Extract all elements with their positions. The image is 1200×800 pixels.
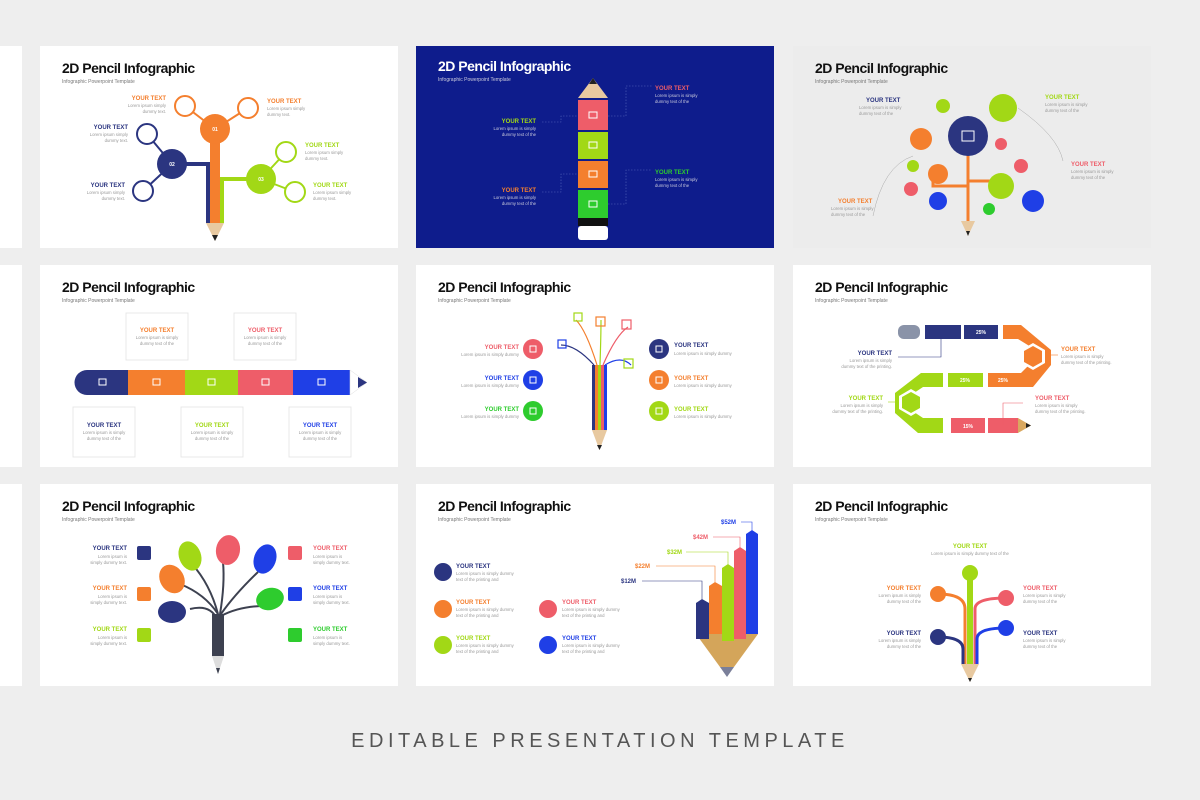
slide 7: leaf tree pencil: Infographic Powerpoint Template bbox=[62, 517, 135, 523]
slide 6: puzzle pencil: Lorem ipsum is simply bbox=[849, 358, 893, 363]
slide 7: leaf tree pencil: Lorem ipsum is bbox=[313, 594, 342, 599]
slide 2: vertical pencil on blue: YOUR TEXT bbox=[502, 119, 536, 125]
slide 8: pencil bar chart: $42M bbox=[693, 535, 708, 541]
slide 8: pencil bar chart bbox=[416, 484, 774, 686]
slide 7: leaf tree pencil: simply dummy text. bbox=[313, 600, 350, 605]
slide 1: branching pencil: Infographic Powerpoint Template bbox=[62, 79, 135, 85]
slide 9: branching pencil 2: Lorem ipsum is simply bbox=[878, 638, 922, 643]
slide 5: colored pencil tree: 2D Pencil Infographic bbox=[438, 279, 571, 295]
slide 4: horizontal pencil: YOUR TEXT bbox=[248, 328, 282, 334]
slide 9: branching pencil 2: dummy text of the bbox=[887, 644, 922, 649]
slide 8: pencil bar chart: Lorem ipsum is simply dummy bbox=[562, 607, 621, 612]
slide 1: branching pencil: 03 bbox=[258, 177, 264, 183]
slide 6: puzzle pencil: 25% bbox=[976, 330, 987, 336]
slide 4: horizontal pencil: Lorem ipsum is simply bbox=[191, 430, 234, 435]
slide 9: branching pencil 2 bbox=[793, 484, 1151, 686]
slide 8: pencil bar chart: Lorem ipsum is simply dummy bbox=[562, 643, 621, 648]
slide 3: bubble tree: YOUR TEXT bbox=[866, 98, 901, 104]
slide 8: pencil bar chart: $22M bbox=[635, 564, 650, 570]
slide 1: branching pencil: 02 bbox=[169, 162, 175, 168]
slide 4: horizontal pencil: 2D Pencil Infographic bbox=[62, 279, 195, 295]
slide 7: leaf tree pencil: YOUR TEXT bbox=[313, 586, 348, 592]
slide 6: puzzle pencil: dummy text of the printing. bbox=[1035, 409, 1086, 414]
slide 7: leaf tree pencil: YOUR TEXT bbox=[93, 627, 127, 633]
slide 9: branching pencil 2: 2D Pencil Infographic bbox=[815, 498, 948, 514]
slide 4: horizontal pencil: dummy text of the bbox=[140, 341, 175, 346]
slide 1: branching pencil: dummy text. bbox=[313, 196, 336, 201]
slide 5: colored pencil tree bbox=[416, 265, 774, 467]
slide 7: leaf tree pencil: Lorem ipsum is bbox=[313, 554, 342, 559]
slide 6: puzzle pencil: Infographic Powerpoint Template bbox=[815, 298, 888, 304]
slide 9: branching pencil 2: Lorem ipsum is simply bbox=[1023, 638, 1066, 643]
slide 6: puzzle pencil: YOUR TEXT bbox=[858, 351, 892, 357]
slide 9: branching pencil 2: dummy text of the bbox=[1023, 599, 1058, 604]
slide 5: colored pencil tree: Lorem ipsum is simply dummy bbox=[461, 414, 520, 419]
slide 7: leaf tree pencil: simply dummy text. bbox=[90, 600, 127, 605]
slide 7: leaf tree pencil bbox=[40, 484, 398, 686]
slide 5: colored pencil tree: Lorem ipsum is simply dummy bbox=[674, 351, 733, 356]
slide 7: leaf tree pencil: Lorem ipsum is bbox=[98, 594, 127, 599]
slide 9: branching pencil 2: YOUR TEXT bbox=[1023, 631, 1058, 637]
slide 9: branching pencil 2: dummy text of the bbox=[1023, 644, 1058, 649]
slide 7: leaf tree pencil: simply dummy text. bbox=[90, 560, 127, 565]
slide 6: puzzle pencil: YOUR TEXT bbox=[849, 396, 883, 402]
slide 5: colored pencil tree: Lorem ipsum is simply dummy bbox=[674, 414, 733, 419]
slide 2: vertical pencil on blue: YOUR TEXT bbox=[655, 86, 690, 92]
slide 8: pencil bar chart: Infographic Powerpoint Template bbox=[438, 517, 511, 523]
slide 3: bubble tree: dummy text of the bbox=[859, 111, 894, 116]
slide 8: pencil bar chart: $32M bbox=[667, 550, 682, 556]
slide 7: leaf tree pencil: YOUR TEXT bbox=[93, 586, 127, 592]
slide 2: vertical pencil on blue: Lorem ipsum is simply bbox=[655, 93, 698, 98]
slide 8: pencil bar chart: $52M bbox=[721, 520, 736, 526]
slide 5: colored pencil tree: YOUR TEXT bbox=[485, 345, 519, 351]
slide 1: branching pencil: 01 bbox=[212, 127, 218, 133]
slide 2: vertical pencil on blue: YOUR TEXT bbox=[502, 188, 536, 194]
slide 1: branching pencil: YOUR TEXT bbox=[305, 143, 340, 149]
slide 4: horizontal pencil: Infographic Powerpoint Template bbox=[62, 298, 135, 304]
slide 3: bubble tree: Lorem ipsum is simply bbox=[1071, 169, 1114, 174]
slide 7: leaf tree pencil: Lorem ipsum is bbox=[98, 635, 127, 640]
slide 1: branching pencil: YOUR TEXT bbox=[267, 99, 302, 105]
slide 4: horizontal pencil: YOUR TEXT bbox=[195, 423, 229, 429]
slide 4: horizontal pencil: YOUR TEXT bbox=[303, 423, 337, 429]
slide 2: vertical pencil on blue: dummy text of the bbox=[502, 132, 537, 137]
slide 9: branching pencil 2: YOUR TEXT bbox=[887, 586, 921, 592]
slide 2: vertical pencil on blue: Infographic Powerpoint Template bbox=[438, 77, 511, 83]
slide 6: puzzle pencil: 2D Pencil Infographic bbox=[815, 279, 948, 295]
slide 7: leaf tree pencil: 2D Pencil Infographic bbox=[62, 498, 195, 514]
slide 7: leaf tree pencil: simply dummy text. bbox=[90, 641, 127, 646]
slide 2: vertical pencil on blue: YOUR TEXT bbox=[655, 170, 690, 176]
slide 4: horizontal pencil: Lorem ipsum is simply bbox=[244, 335, 287, 340]
slide 3: bubble tree bbox=[793, 46, 1151, 248]
slide 8: pencil bar chart: Lorem ipsum is simply dummy bbox=[456, 607, 515, 612]
slide 8: pencil bar chart: YOUR TEXT bbox=[456, 636, 491, 642]
slide 2: vertical pencil on blue: Lorem ipsum is simply bbox=[493, 195, 537, 200]
slide 3: bubble tree: Infographic Powerpoint Template bbox=[815, 79, 888, 85]
slide 2: vertical pencil on blue: dummy text of the bbox=[655, 99, 690, 104]
slide 3: bubble tree: YOUR TEXT bbox=[1045, 95, 1080, 101]
slide 9: branching pencil 2: Infographic Powerpoint Template bbox=[815, 517, 888, 523]
slide 6: puzzle pencil: Lorem ipsum is simply bbox=[1061, 354, 1104, 359]
slide 1: branching pencil: Lorem ipsum simply bbox=[267, 106, 306, 111]
slide 6: puzzle pencil: 15% bbox=[963, 424, 974, 430]
slide 1: branching pencil: YOUR TEXT bbox=[94, 125, 128, 131]
slide 5: colored pencil tree: Lorem ipsum is simply dummy bbox=[674, 383, 733, 388]
slide 8: pencil bar chart: 2D Pencil Infographic bbox=[438, 498, 571, 514]
slide 4: horizontal pencil: dummy text of the bbox=[303, 436, 338, 441]
slide 8: pencil bar chart: text of the printing and bbox=[562, 649, 605, 654]
slide 6: puzzle pencil: dummy text of the printing. bbox=[1061, 360, 1112, 365]
slide 6: puzzle pencil bbox=[793, 265, 1151, 467]
slide 1: branching pencil: Lorem ipsum simply bbox=[128, 103, 167, 108]
slide 1: branching pencil: dummy text. bbox=[105, 138, 128, 143]
slide 2: vertical pencil on blue: Lorem ipsum is simply bbox=[493, 126, 537, 131]
footer caption: EDITABLE PRESENTATION TEMPLATE bbox=[351, 730, 849, 752]
slide 3: bubble tree: Lorem ipsum is simply bbox=[859, 105, 902, 110]
slide 8: pencil bar chart: text of the printing and bbox=[456, 577, 499, 582]
slide 6: puzzle pencil: YOUR TEXT bbox=[1061, 347, 1096, 353]
slide 6: puzzle pencil: Lorem ipsum is simply bbox=[1035, 403, 1078, 408]
slide 5: colored pencil tree: YOUR TEXT bbox=[674, 343, 709, 349]
slide 2: vertical pencil on blue: dummy text of the bbox=[502, 201, 537, 206]
slide 5: colored pencil tree: YOUR TEXT bbox=[485, 407, 519, 413]
slide 1: branching pencil: YOUR TEXT bbox=[313, 183, 348, 189]
slide 8: pencil bar chart: YOUR TEXT bbox=[562, 600, 597, 606]
slide 2: vertical pencil on blue: dummy text of the bbox=[655, 183, 690, 188]
slide 2: vertical pencil on blue: 2D Pencil Infographic bbox=[438, 58, 571, 74]
slide 9: branching pencil 2: Lorem ipsum is simply dummy text of the bbox=[931, 551, 1010, 556]
slide 4: horizontal pencil: YOUR TEXT bbox=[140, 328, 174, 334]
slide 1: branching pencil: YOUR TEXT bbox=[132, 96, 166, 102]
slide 6: puzzle pencil: 25% bbox=[998, 378, 1009, 384]
slide 3: bubble tree: dummy text of the bbox=[831, 212, 866, 217]
slide 1: branching pencil: Lorem ipsum simply bbox=[305, 150, 344, 155]
slide 9: branching pencil 2: Lorem ipsum is simply bbox=[1023, 593, 1066, 598]
slide 8: pencil bar chart: YOUR TEXT bbox=[562, 636, 597, 642]
slide 3: bubble tree: Lorem ipsum is simply bbox=[831, 206, 874, 211]
slide 5: colored pencil tree: Infographic Powerpoint Template bbox=[438, 298, 511, 304]
slide 9: branching pencil 2: Lorem ipsum is simply bbox=[878, 593, 922, 598]
slide 1: branching pencil: dummy text. bbox=[143, 109, 166, 114]
slide 7: leaf tree pencil: Lorem ipsum is bbox=[313, 635, 342, 640]
slide 2: vertical pencil on blue: Lorem ipsum is simply bbox=[655, 177, 698, 182]
slide 7: leaf tree pencil: YOUR TEXT bbox=[313, 627, 348, 633]
slide 3: bubble tree: dummy text of the bbox=[1045, 108, 1080, 113]
slide 1: branching pencil: YOUR TEXT bbox=[91, 183, 125, 189]
slide 5: colored pencil tree: YOUR TEXT bbox=[485, 376, 519, 382]
slide 6: puzzle pencil: 25% bbox=[960, 378, 971, 384]
slide 3: bubble tree: YOUR TEXT bbox=[1071, 162, 1106, 168]
slide 5: colored pencil tree: YOUR TEXT bbox=[674, 376, 709, 382]
slide 7: leaf tree pencil: simply dummy text. bbox=[313, 641, 350, 646]
slide 6: puzzle pencil: dummy text of the printing. bbox=[832, 409, 883, 414]
slide 8: pencil bar chart: text of the printing and bbox=[562, 613, 605, 618]
slide 4: horizontal pencil: Lorem ipsum is simply bbox=[136, 335, 179, 340]
slide 3: bubble tree: Lorem ipsum is simply bbox=[1045, 102, 1088, 107]
slide 6: puzzle pencil: YOUR TEXT bbox=[1035, 396, 1070, 402]
slide 8: pencil bar chart: text of the printing and bbox=[456, 649, 499, 654]
slide 3: bubble tree: YOUR TEXT bbox=[838, 199, 873, 205]
slide 1: branching pencil bbox=[40, 46, 398, 248]
slide 7: leaf tree pencil: YOUR TEXT bbox=[313, 546, 348, 552]
slide 9: branching pencil 2: YOUR TEXT bbox=[887, 631, 921, 637]
slide 1: branching pencil: dummy text. bbox=[267, 112, 290, 117]
slide 9: branching pencil 2: YOUR TEXT bbox=[1023, 586, 1058, 592]
slide 5: colored pencil tree: Lorem ipsum is simply dummy bbox=[461, 352, 520, 357]
slide 4: horizontal pencil: dummy text of the bbox=[195, 436, 230, 441]
slide 4: horizontal pencil: Lorem ipsum is simply bbox=[299, 430, 342, 435]
slide 1: branching pencil: dummy text. bbox=[305, 156, 328, 161]
slide 5: colored pencil tree: YOUR TEXT bbox=[674, 407, 709, 413]
slide 7: leaf tree pencil: simply dummy text. bbox=[313, 560, 350, 565]
slide 1: branching pencil: 2D Pencil Infographic bbox=[62, 60, 195, 76]
slide 8: pencil bar chart: Lorem ipsum is simply dummy bbox=[456, 643, 515, 648]
slide 4: horizontal pencil: dummy text of the bbox=[248, 341, 283, 346]
slide 8: pencil bar chart: $12M bbox=[621, 579, 636, 585]
slide 4: horizontal pencil: YOUR TEXT bbox=[87, 423, 121, 429]
slide 8: pencil bar chart: text of the printing and bbox=[456, 613, 499, 618]
left partial slides bbox=[0, 46, 22, 248]
slide 5: colored pencil tree: Lorem ipsum is simply dummy bbox=[461, 383, 520, 388]
slide 9: branching pencil 2: dummy text of the bbox=[887, 599, 922, 604]
slide 1: branching pencil: Lorem ipsum simply bbox=[87, 190, 126, 195]
slide 8: pencil bar chart: YOUR TEXT bbox=[456, 600, 491, 606]
slide 8: pencil bar chart: YOUR TEXT bbox=[456, 564, 491, 570]
slide 7: leaf tree pencil: YOUR TEXT bbox=[93, 546, 127, 552]
slide 1: branching pencil: Lorem ipsum simply bbox=[313, 190, 352, 195]
slide 4: horizontal pencil: dummy text of the bbox=[87, 436, 122, 441]
slide 2: vertical pencil on blue bbox=[416, 46, 774, 248]
slide 1: branching pencil: dummy text. bbox=[102, 196, 125, 201]
slide 1: branching pencil: Lorem ipsum simply bbox=[90, 132, 129, 137]
slide 3: bubble tree: dummy text of the bbox=[1071, 175, 1106, 180]
slide 3: bubble tree: 2D Pencil Infographic bbox=[815, 60, 948, 76]
slide 4: horizontal pencil: Lorem ipsum is simply bbox=[83, 430, 126, 435]
slide 6: puzzle pencil: dummy text of the printing. bbox=[841, 364, 892, 369]
slide 6: puzzle pencil: Lorem ipsum is simply bbox=[840, 403, 884, 408]
slide 8: pencil bar chart: Lorem ipsum is simply dummy bbox=[456, 571, 515, 576]
slide 4: horizontal pencil bbox=[40, 265, 398, 467]
slide 9: branching pencil 2: YOUR TEXT bbox=[953, 544, 987, 550]
slide 7: leaf tree pencil: Lorem ipsum is bbox=[98, 554, 127, 559]
